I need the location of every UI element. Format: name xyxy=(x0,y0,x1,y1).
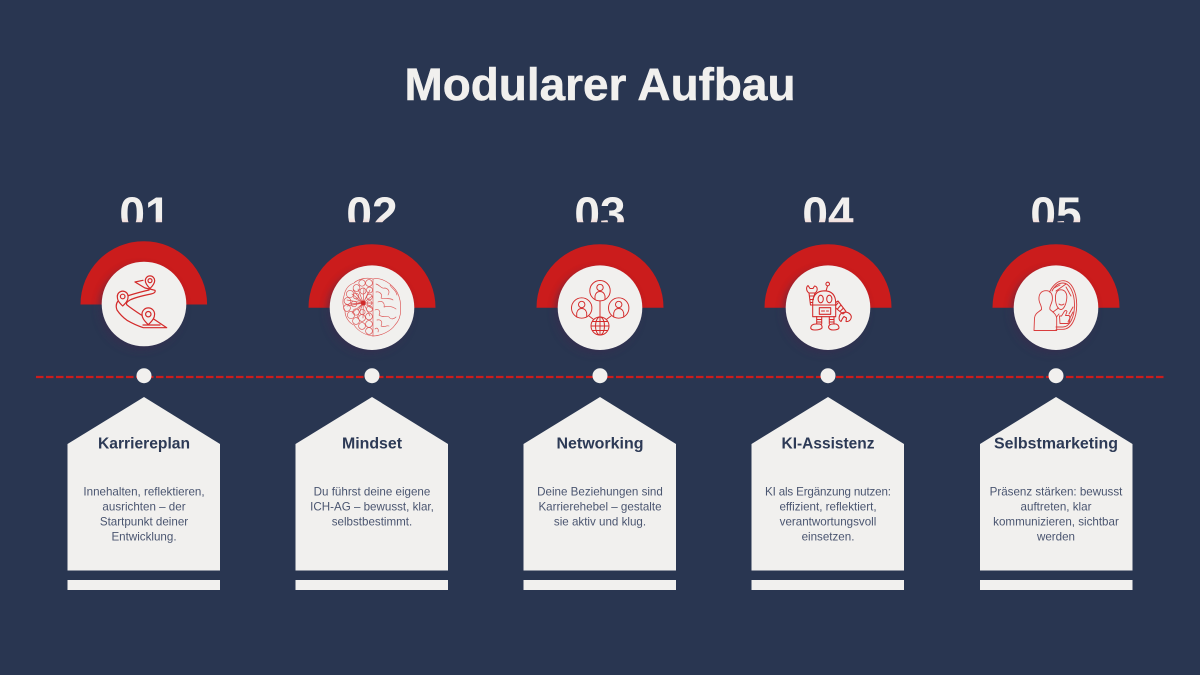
icon circle 03 xyxy=(555,265,642,354)
text 05: werden xyxy=(1036,530,1075,544)
bar 05 xyxy=(980,580,1132,590)
icon: brain xyxy=(343,278,401,336)
house card 01 xyxy=(68,397,220,570)
text 01: Startpunkt deiner xyxy=(100,516,188,528)
heading 04: KI-Assistenz xyxy=(782,436,874,452)
number 05: 05 xyxy=(1030,188,1082,240)
number 04: 04 xyxy=(802,188,854,240)
red semicircle 05 xyxy=(992,244,1120,308)
number 02: 02 xyxy=(346,188,398,240)
icon: road with map pins xyxy=(116,276,167,328)
text 03: sie aktiv und klug. xyxy=(554,516,646,528)
text 02: ICH-AG – bewusst, klar, xyxy=(310,500,434,514)
heading 05: Selbstmarketing xyxy=(994,436,1118,452)
text 01: Innehalten, reflektieren, xyxy=(83,486,205,498)
text 04: verantwortungsvoll xyxy=(780,516,876,528)
text 02: selbstbestimmt. xyxy=(332,516,412,528)
module 02: Mindset xyxy=(296,188,448,590)
red semicircle 03 xyxy=(536,244,664,308)
text 01: Entwicklung. xyxy=(111,530,177,544)
text 02: Du führst deine eigene xyxy=(314,486,430,498)
dashed timeline xyxy=(36,368,1164,383)
house card 05 xyxy=(980,397,1132,570)
house card 03 xyxy=(524,397,676,570)
text 01: ausrichten – der xyxy=(102,500,186,514)
text 04: KI als Ergänzung nutzen: xyxy=(765,486,891,498)
text 03: Deine Beziehungen sind xyxy=(537,486,663,498)
icon: people network xyxy=(572,280,629,335)
bar 03 xyxy=(524,580,676,590)
infographic canvas xyxy=(36,66,1164,590)
heading 01: Karriereplan xyxy=(98,436,190,452)
red semicircle 02 xyxy=(308,244,436,308)
heading 02: Mindset xyxy=(342,436,403,452)
icon circle 04 xyxy=(783,265,870,354)
number 01: 01 xyxy=(119,188,171,240)
bar 04 xyxy=(752,580,904,590)
bar 02 xyxy=(296,580,448,590)
house card 04 xyxy=(752,397,904,570)
number 03: 03 xyxy=(574,188,626,240)
module 03: Networking xyxy=(524,188,676,590)
icon circle 01 xyxy=(99,262,186,350)
icon circle 02 xyxy=(327,265,414,354)
icon: robot xyxy=(807,282,851,330)
text 04: einsetzen. xyxy=(802,530,854,544)
module 04: KI-Assistenz xyxy=(752,188,904,590)
heading 03: Networking xyxy=(556,436,644,452)
red semicircle 01 xyxy=(80,241,207,304)
red semicircle 04 xyxy=(764,244,892,308)
module 01: Karriereplan xyxy=(68,188,220,590)
icon: person at mirror xyxy=(1034,281,1077,330)
text 05: Präsenz stärken: bewusst xyxy=(990,486,1123,498)
module 05: Selbstmarketing xyxy=(980,188,1132,590)
text 05: auftreten, klar xyxy=(1021,500,1092,514)
bar 01 xyxy=(68,580,220,590)
title: Modularer Aufbau xyxy=(404,59,796,110)
text 04: effizient, reflektiert, xyxy=(779,500,877,514)
icon circle 05 xyxy=(1011,265,1098,354)
text 03: Karrierehebel – gestalte xyxy=(538,500,662,514)
text 05: kommunizieren, sichtbar xyxy=(993,516,1119,528)
house card 02 xyxy=(296,397,448,570)
